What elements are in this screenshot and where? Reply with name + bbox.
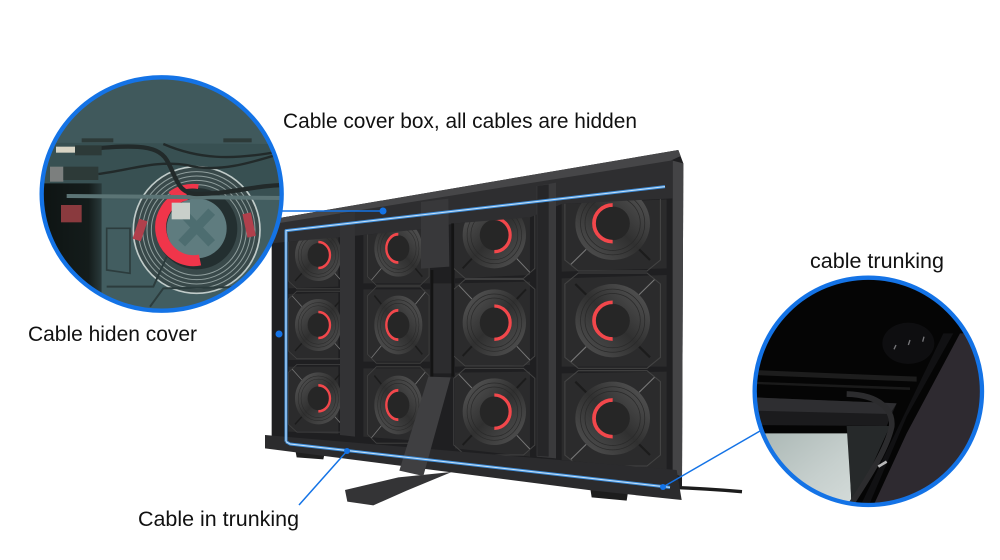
rails xyxy=(753,370,917,382)
highlighted cable route xyxy=(286,187,670,487)
support foot left xyxy=(295,448,325,459)
leader line: cable cover xyxy=(280,210,383,212)
power cable xyxy=(670,487,742,492)
dark strip xyxy=(860,333,953,507)
shelf xyxy=(758,404,896,426)
connector xyxy=(172,203,190,219)
cable xyxy=(847,394,892,503)
shelf xyxy=(67,194,287,200)
cable outlet xyxy=(882,323,934,364)
marker: cable trunking xyxy=(660,484,666,490)
red tint on spiral xyxy=(137,213,252,240)
module cells xyxy=(288,199,667,470)
cables xyxy=(77,144,287,194)
marker: cable in trunking xyxy=(344,448,350,454)
marker: cable cover xyxy=(380,208,386,214)
leader line: cable in trunking xyxy=(299,451,347,505)
LED cabinet rear view xyxy=(265,150,742,505)
frame right edge xyxy=(673,161,683,477)
marker: cable route left xyxy=(276,330,282,338)
cabinet frame xyxy=(272,150,683,487)
leader line: cable trunking xyxy=(663,431,760,487)
cable cover top band xyxy=(272,153,673,243)
label: cable cover box: Cable cover box, all cables are hidden xyxy=(283,110,637,133)
angled cover xyxy=(874,333,980,503)
spiral xyxy=(133,167,260,293)
silver floor xyxy=(765,433,852,502)
stand upright xyxy=(399,377,451,476)
cable junction box xyxy=(421,199,449,269)
red ring xyxy=(161,195,200,261)
label: cable trunking: cable trunking xyxy=(810,250,944,273)
support foot right xyxy=(590,487,628,501)
callout circle: cable hidden cover xyxy=(37,77,287,313)
fans xyxy=(288,176,660,466)
frame top edge xyxy=(272,150,681,224)
vertical posts xyxy=(340,183,556,458)
bottom trunking base xyxy=(265,435,682,500)
stand base xyxy=(345,472,452,505)
label: cable in trunking: Cable in trunking xyxy=(138,508,299,531)
label: cable hiden cover: Cable hiden cover xyxy=(28,323,197,346)
plugs xyxy=(56,147,75,153)
callout circle: cable trunking xyxy=(753,278,993,517)
